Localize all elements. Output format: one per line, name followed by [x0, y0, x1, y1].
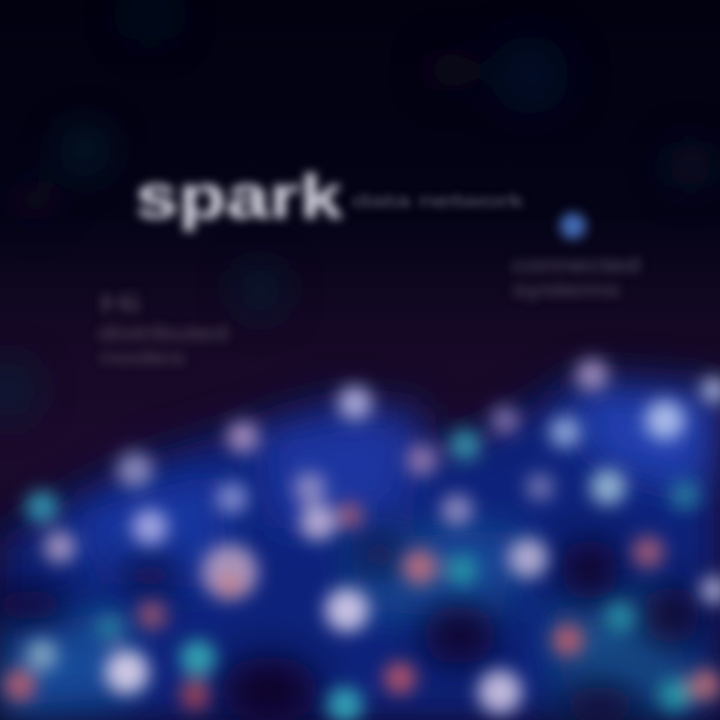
network: blue mesh base — [0, 375, 720, 720]
network: node dots — [4, 359, 720, 720]
subtitle next to logo: data network — [352, 191, 526, 211]
right caption — [512, 255, 640, 300]
icon: blue star glow — [560, 213, 586, 239]
faint background network glows — [0, 0, 714, 418]
right caption: connected — [512, 255, 640, 277]
right caption: systems — [512, 280, 620, 300]
left caption: Hi — [100, 288, 140, 318]
left caption: distributed — [98, 323, 228, 345]
network: dark gaps — [0, 537, 702, 720]
left caption: nodes — [100, 348, 185, 368]
left caption — [98, 288, 228, 368]
title: logo wordmark: spark — [135, 163, 344, 232]
